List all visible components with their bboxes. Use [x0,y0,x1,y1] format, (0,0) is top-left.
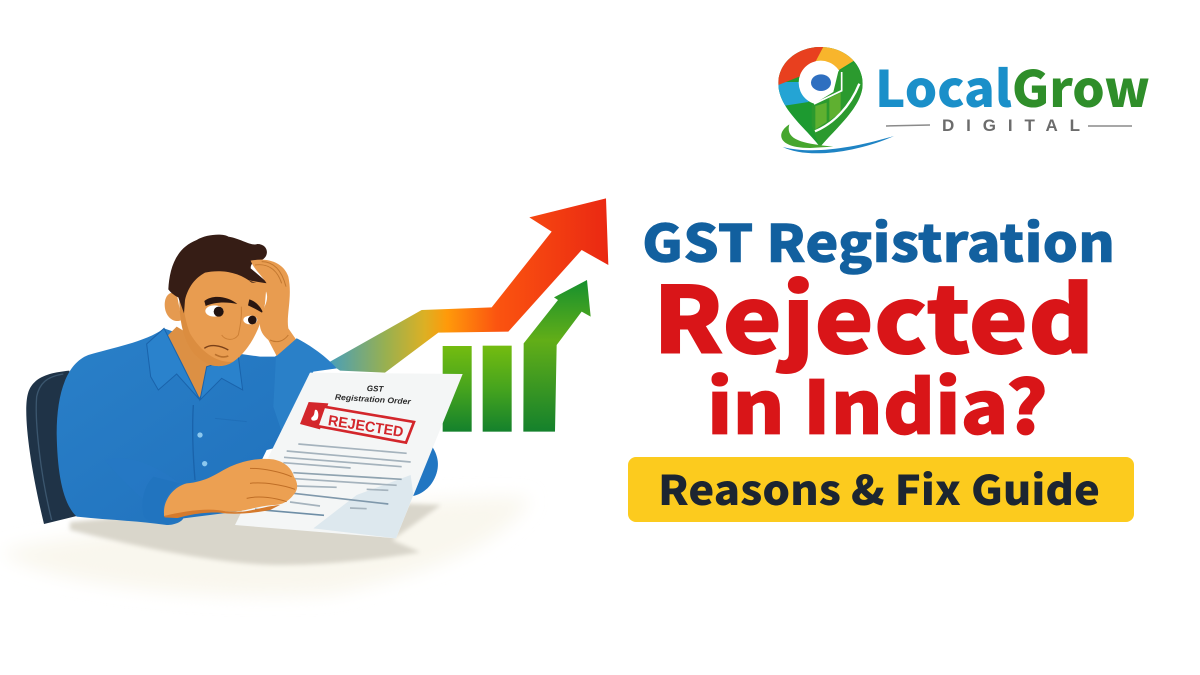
logo swoosh [781,124,833,148]
raised hand [247,260,296,356]
heading line 3: in India? [707,349,1048,456]
logo wordmark: LocalGrow [875,50,1150,122]
worried man with rejected document [26,235,463,538]
document lines [255,444,411,515]
shirt cuff [142,477,183,524]
heading line 2: Rejected [653,247,1094,380]
ear [165,293,182,321]
logo tagline: DIGITAL [942,116,1080,135]
torso and arm [57,328,337,525]
yellow subtitle badge: Reasons & Fix Guide [658,457,1100,517]
bar 1 [443,346,472,432]
tagline rules [886,125,1132,126]
shirt buttons [197,432,207,466]
heading line 1: GST Registration [642,202,1115,277]
rejected stamp [300,402,414,443]
holding hand [164,459,297,522]
chair [26,371,77,524]
floor shadow [0,497,530,596]
growth arrow chart [328,198,608,432]
facial features [204,297,263,357]
title block [642,202,1115,456]
hair [168,235,268,313]
neck [167,327,240,398]
face [179,270,267,366]
rejected stamp: REJECTED [327,413,404,441]
bar 2 [483,346,512,432]
green arrow bar [523,280,591,432]
document title: GST [367,384,385,394]
red-orange trend arrow [328,198,608,373]
document [235,373,463,538]
collar [147,328,243,400]
right sleeve behind paper [402,446,438,497]
document: Registration Order [335,393,412,406]
logo pin icon [778,47,894,154]
raised sleeve [273,338,337,437]
logo [770,42,1150,153]
